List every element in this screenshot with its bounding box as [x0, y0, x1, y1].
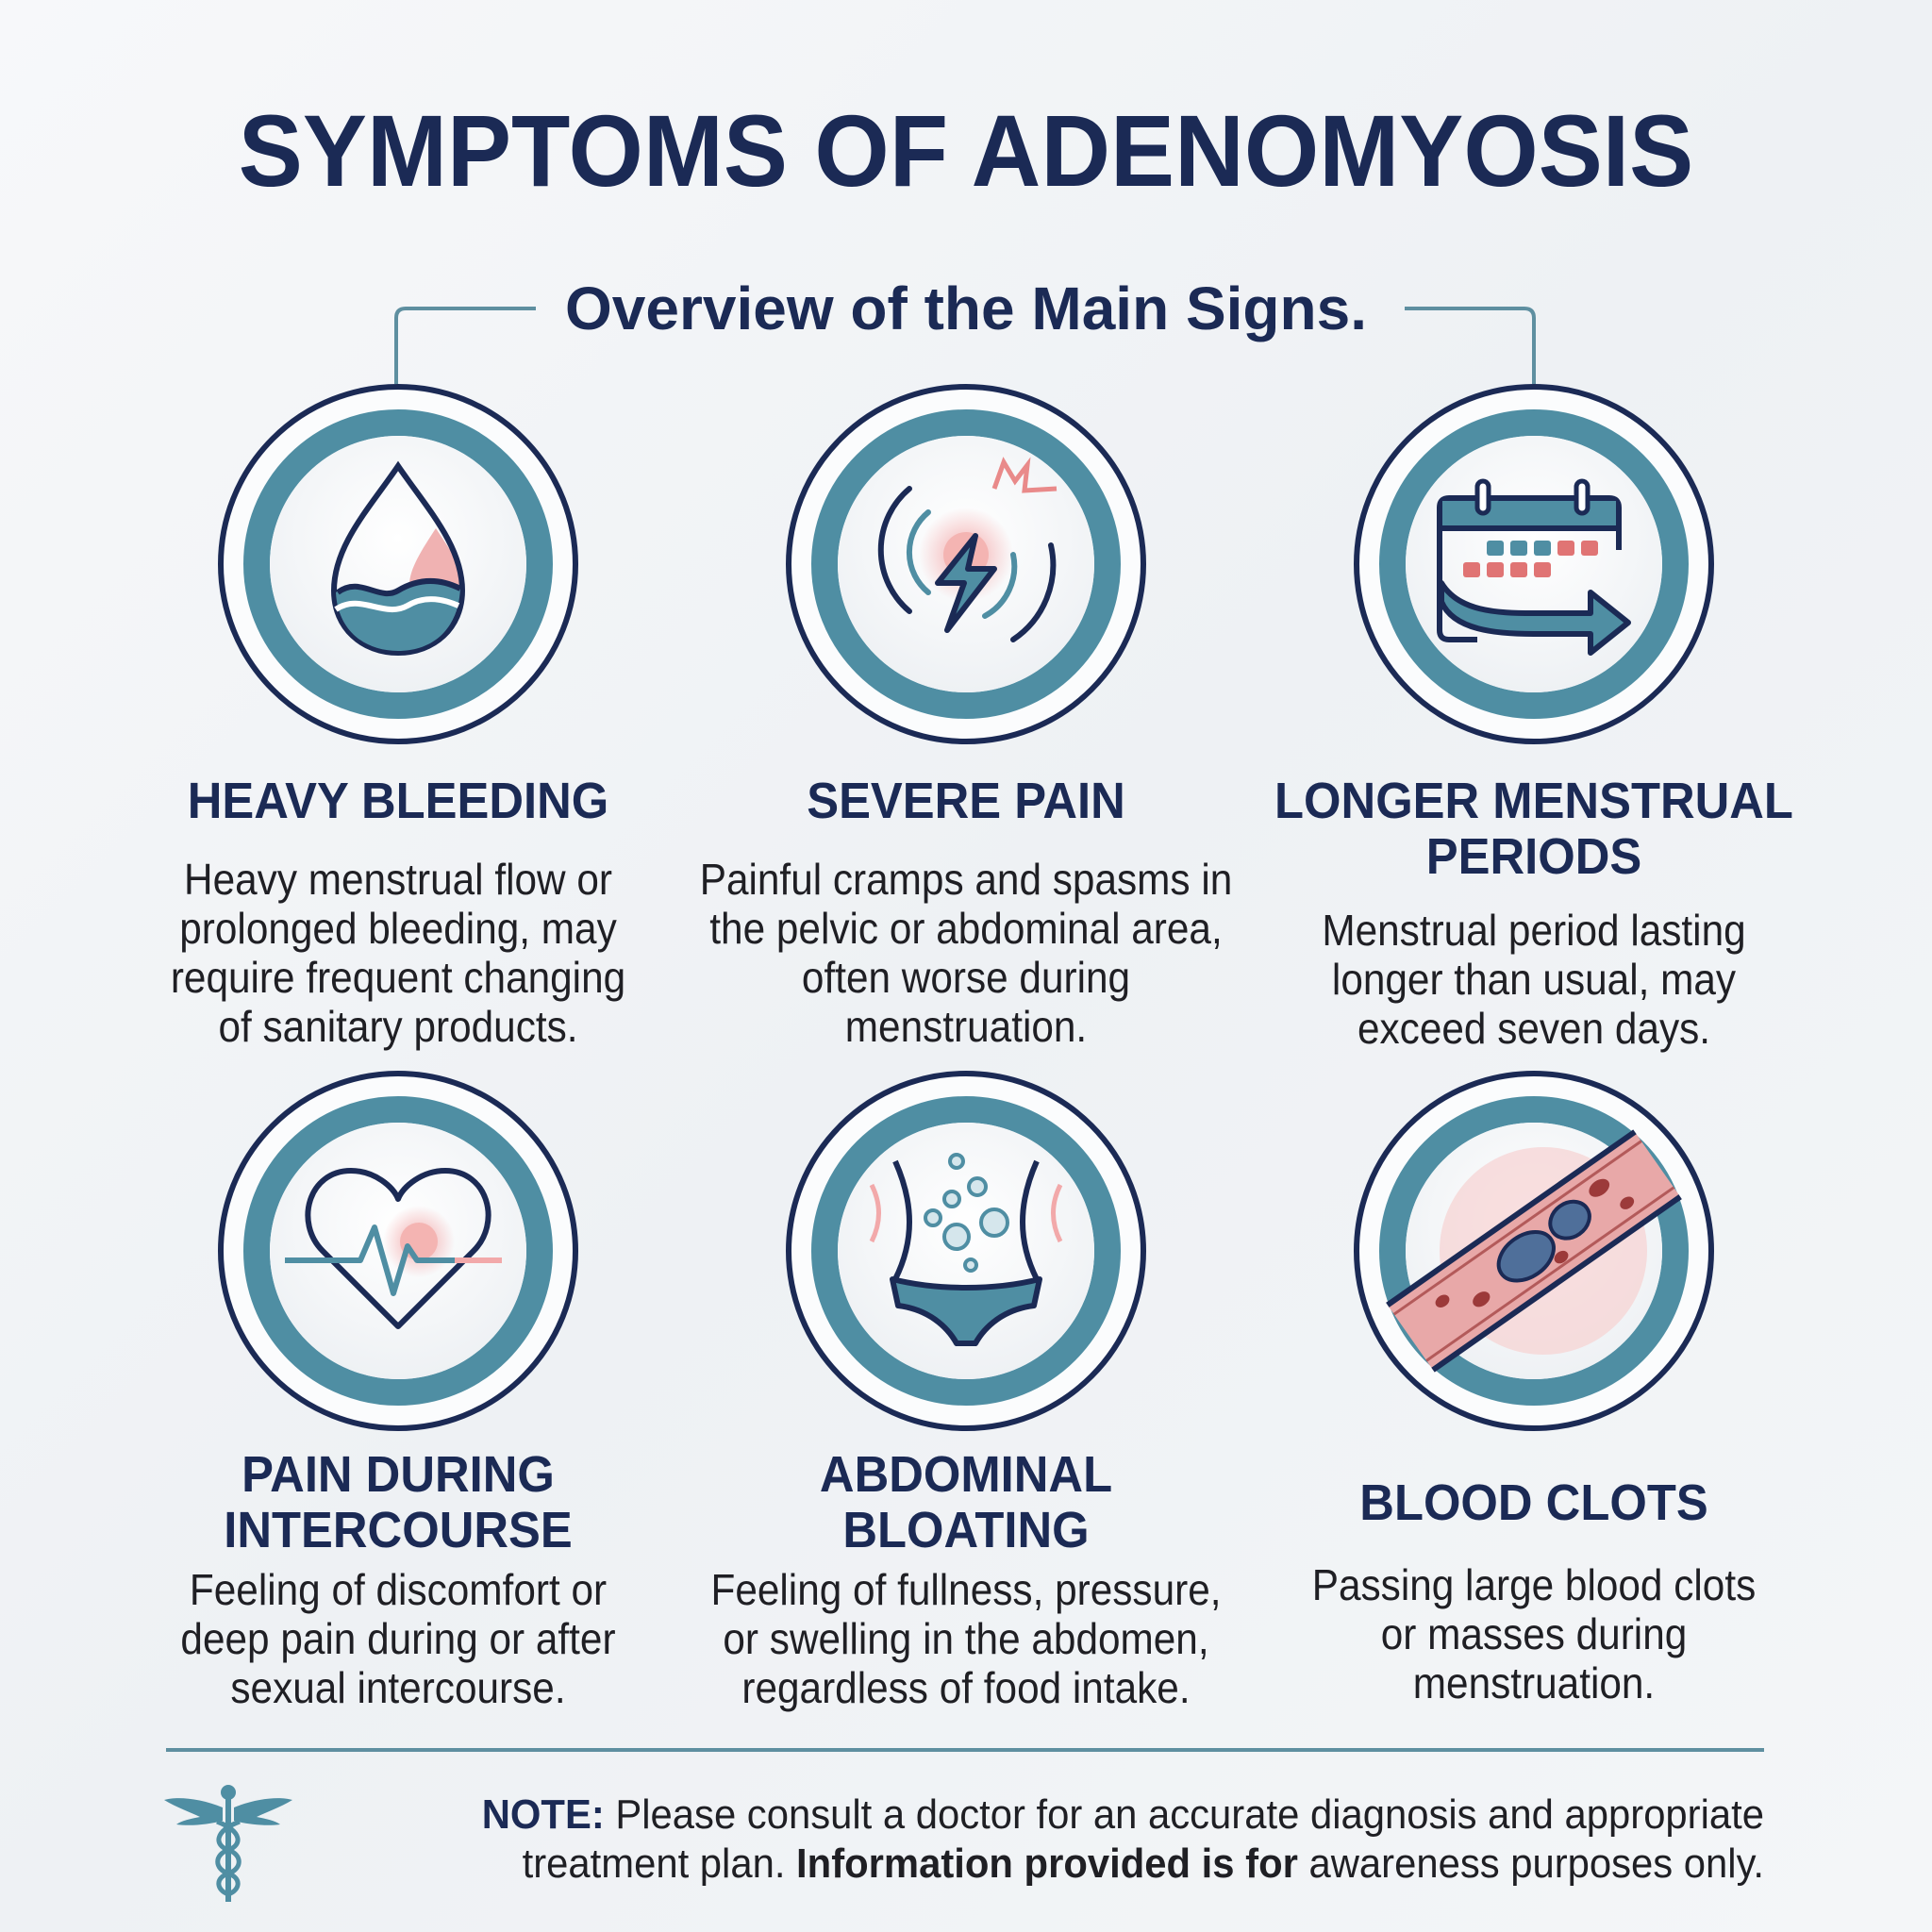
text: heavy bleeding	[171, 855, 625, 1051]
circle: pain during intercourse	[221, 1074, 575, 1428]
note: treatment plan. Information provided is for awareness purposes only.	[523, 1840, 1764, 1887]
text: intercourse	[180, 1565, 616, 1712]
circle: abdominal bloating	[789, 1074, 1143, 1428]
text: intercourse: sexual intercourse.	[230, 1663, 566, 1712]
text: longer periods: Menstrual period lasting	[1322, 906, 1746, 955]
text: longer periods: exceed seven days.	[1357, 1004, 1710, 1053]
heading: pain during intercourse: INTERCOURSE	[224, 1502, 573, 1558]
text: bloating: Feeling of fullness, pressure,	[710, 1565, 1222, 1614]
icon: pain burst	[881, 462, 1057, 640]
heading: longer menstrual periods	[1274, 773, 1793, 885]
heading: longer menstrual periods: PERIODS	[1426, 828, 1641, 885]
text: heavy bleeding: of sanitary products.	[218, 1002, 578, 1051]
text: blood clots: menstruation.	[1413, 1658, 1655, 1707]
note: NOTE: Please consult a doctor for an accurate diagnosis and appropriate	[482, 1791, 1764, 1838]
text: severe pain: the pelvic or abdominal area,	[709, 904, 1223, 953]
icon: heart pulse	[285, 1171, 502, 1326]
heading: blood clots: BLOOD CLOTS	[1359, 1474, 1708, 1531]
text: severe pain	[700, 855, 1232, 1051]
circle: severe pain	[789, 387, 1143, 741]
heading: abdominal bloating	[820, 1446, 1112, 1558]
title: SYMPTOMS OF ADENOMYOSIS	[239, 93, 1693, 208]
text: blood clots: or masses during	[1381, 1609, 1687, 1658]
text: longer periods: longer than usual, may	[1332, 955, 1736, 1004]
connector lines	[396, 308, 1534, 384]
divider	[166, 1748, 1764, 1752]
icon: caduceus	[164, 1785, 292, 1902]
circle: heavy bleeding	[221, 387, 575, 741]
heading: severe pain: SEVERE PAIN	[807, 773, 1125, 829]
heading: pain during intercourse: PAIN DURING	[242, 1446, 555, 1503]
text: intercourse: Feeling of discomfort or	[190, 1565, 607, 1614]
text: longer periods	[1322, 906, 1746, 1053]
text: bloating: regardless of food intake.	[741, 1663, 1191, 1712]
text: heavy bleeding: require frequent changing	[171, 953, 625, 1002]
icon: calendar arrow	[1440, 481, 1628, 653]
heading: heavy bleeding: HEAVY BLEEDING	[188, 773, 608, 829]
text: bloating: or swelling in the abdomen,	[723, 1614, 1209, 1663]
icon: abdomen bubbles	[872, 1155, 1060, 1343]
circle: longer periods	[1357, 387, 1711, 741]
text: blood clots	[1312, 1560, 1756, 1707]
text: severe pain: menstruation.	[845, 1002, 1087, 1051]
text: heavy bleeding: Heavy menstrual flow or	[184, 855, 612, 904]
heading: pain during intercourse	[224, 1446, 573, 1558]
text: severe pain: Painful cramps and spasms in	[700, 855, 1232, 904]
text: intercourse: deep pain during or after	[180, 1614, 616, 1663]
circle: blood clots	[1357, 1074, 1711, 1428]
text: heavy bleeding: prolonged bleeding, may	[179, 904, 617, 953]
text: blood clots: Passing large blood clots	[1312, 1560, 1756, 1609]
text: bloating	[710, 1565, 1222, 1712]
heading: abdominal bloating: BLOATING	[842, 1502, 1090, 1558]
subtitle: Overview of the Main Signs.	[565, 275, 1367, 342]
heading: abdominal bloating: ABDOMINAL	[820, 1446, 1112, 1503]
heading: longer menstrual periods: LONGER MENSTRUAL	[1274, 773, 1793, 829]
icon: blood drop	[334, 466, 464, 653]
text: severe pain: often worse during	[802, 953, 1130, 1002]
icon: blood vessel with clots	[1388, 1132, 1680, 1370]
note	[482, 1791, 1764, 1887]
